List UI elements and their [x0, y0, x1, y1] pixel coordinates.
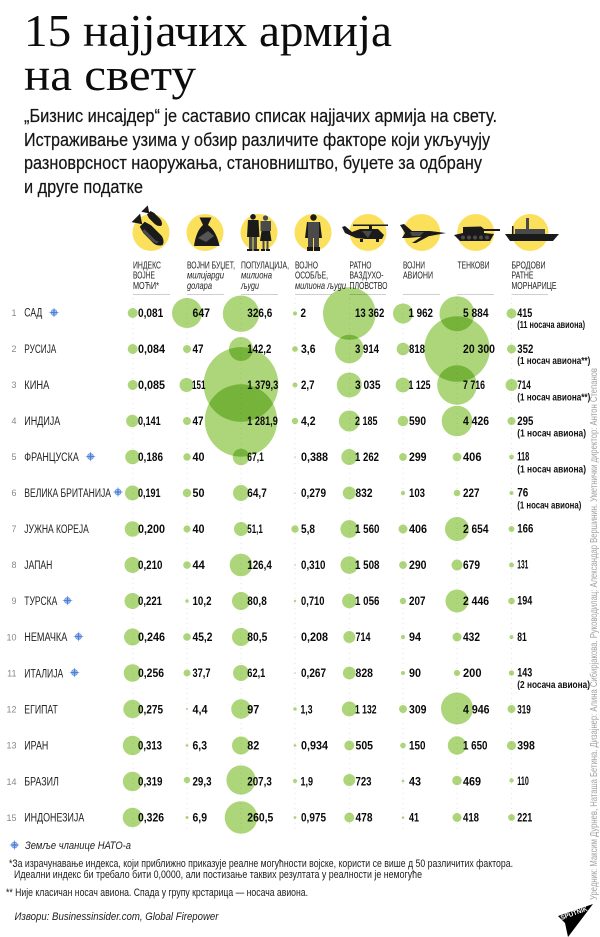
column: military power index: 0,256: [138, 668, 164, 680]
column: military budget: 45,2: [192, 632, 212, 644]
column headers: ВОЈНИ: [403, 260, 425, 272]
country ranking list: САД: [24, 308, 42, 320]
icon: tank: [454, 214, 500, 251]
column: tanks: 432: [463, 632, 480, 644]
column: tanks: 4 946: [463, 704, 490, 716]
column: navy ships: 118: [517, 452, 530, 464]
intro text: разноврсност наоружања, становништво, буџете за одбрану: [24, 153, 482, 173]
column: population: 97: [247, 704, 259, 716]
column: military aircraft: [393, 304, 433, 824]
icon: warship: [505, 214, 559, 251]
column: military aircraft: 1 125: [408, 380, 431, 392]
column: military personnel: 0,310: [301, 560, 326, 572]
column: air force: 1 560: [355, 524, 380, 536]
column headers: ВОЈНО: [295, 260, 318, 272]
country ranking list: [6, 308, 111, 824]
title: 15 најјачих армија: [24, 6, 392, 56]
column: military aircraft: 150: [409, 740, 426, 752]
column: military budget: 151: [192, 380, 206, 392]
column: tanks: [424, 296, 495, 824]
country ranking list: КИНА: [24, 380, 50, 392]
country ranking list: 3: [11, 380, 16, 390]
country ranking list: 7: [11, 524, 16, 534]
column: military power index: 0,210: [138, 560, 162, 572]
column: tanks: 2 446: [463, 596, 489, 608]
column: air force: 478: [356, 812, 373, 824]
column: navy ships: 319: [517, 704, 531, 716]
column headers: милијарди: [187, 270, 224, 282]
column headers: БРОДОВИ: [512, 260, 546, 272]
footnotes: [6, 858, 513, 899]
column: military aircraft: 41: [409, 812, 419, 824]
column: military budget: 40: [192, 524, 204, 536]
country ranking list: 4: [11, 416, 16, 426]
country ranking list: 14: [6, 777, 16, 787]
column: air force: 3 035: [355, 380, 381, 392]
column: military budget: 44: [192, 560, 205, 572]
country ranking list: 13: [6, 740, 16, 750]
country ranking list: ТУРСКА: [24, 596, 58, 608]
column: tanks: 469: [463, 776, 481, 788]
column: military aircraft: 406: [409, 524, 427, 536]
column: air force: 714: [356, 632, 371, 644]
column: population: 80,5: [247, 632, 268, 644]
column: navy ships: 131: [517, 560, 529, 572]
column: military personnel: [291, 308, 329, 824]
column: tanks: 418: [463, 812, 480, 824]
column: military personnel: 1,9: [300, 776, 313, 788]
column: population: 67,1: [247, 452, 264, 464]
column: military budget: 29,3: [192, 776, 212, 788]
sources: Извори: Businessinsider.com, Global Firepower: [14, 911, 220, 923]
column headers: ИНДЕКС: [133, 260, 161, 272]
column: air force: 1 262: [355, 452, 379, 464]
column: tanks: 2 654: [463, 524, 489, 536]
column: military budget: 6,3: [192, 740, 207, 752]
column: population: 260,5: [247, 812, 274, 824]
column: military power index: 0,081: [138, 308, 164, 320]
column: military power index: 0,326: [138, 812, 164, 824]
column: tanks: 227: [463, 488, 480, 500]
column: military power index: 0,246: [138, 632, 165, 644]
icon: people: [240, 214, 278, 251]
country ranking list: 5: [11, 452, 16, 462]
column: air force: 505: [356, 740, 374, 752]
column: tanks: 20 300: [463, 344, 495, 356]
column headers: ВОЈНИ БУЏЕТ,: [187, 260, 235, 272]
column: military aircraft: 103: [409, 488, 425, 500]
country ranking list: БРАЗИЛ: [24, 776, 59, 788]
country ranking list: ВЕЛИКА БРИТАНИЈА: [24, 488, 111, 500]
column: air force: 723: [356, 776, 372, 788]
column: military budget: 40: [192, 452, 204, 464]
column: population: 142,2: [247, 344, 271, 356]
intro text: и друге податке: [24, 177, 143, 197]
column: tanks: 200: [463, 668, 482, 680]
title: на свету: [24, 50, 197, 100]
column: military personnel: 0,267: [301, 668, 326, 680]
column: air force: 1 056: [355, 596, 380, 608]
column: military budget: 37,7: [192, 668, 210, 680]
column headers: милиона: [241, 270, 272, 282]
column: military budget: 6,9: [192, 812, 207, 824]
intro text: [24, 106, 497, 197]
country ranking list: 12: [6, 704, 16, 714]
logo: Sputnik: [558, 904, 593, 937]
column: military aircraft: 590: [409, 416, 426, 428]
NATO markers: [48, 307, 124, 678]
column: military budget: [172, 298, 212, 824]
credits: Уредник: Максим Дурнев, Наташа Бетина. Дизајнер: Алина Сибирјакова. Руководилац: Александар Вершинин. Уметнички директор: Антон Степанов: [588, 368, 600, 900]
logo: Sputnik: SPUTNIK: [560, 906, 589, 922]
column headers: ПОПУЛАЦИЈА,: [241, 260, 289, 272]
icon: helicopter: [342, 214, 388, 251]
column: population: 80,8: [247, 596, 267, 608]
column: population: 1 281,9: [247, 416, 278, 428]
column: military power index: 0,200: [138, 524, 165, 536]
column: military aircraft: 94: [409, 632, 422, 644]
column headers: АВИОНИ: [403, 270, 433, 282]
country ranking list: ФРАНЦУСКА: [24, 452, 79, 464]
column: military power index: 0,319: [138, 776, 162, 788]
column: military aircraft: 309: [409, 704, 426, 716]
column headers: РАТНО: [350, 260, 372, 272]
country ranking list: 2: [11, 344, 16, 354]
column: military personnel: 0,279: [301, 488, 326, 500]
column headers: МОРНАРИЦЕ: [512, 280, 556, 292]
column: military aircraft: 90: [409, 668, 421, 680]
icon: soldier: [294, 214, 332, 251]
column: tanks: 7 716: [463, 380, 485, 392]
column: military power index: 0,275: [138, 704, 164, 716]
column: navy ships: 143: [517, 668, 532, 680]
title: [24, 6, 392, 100]
column: military aircraft: 290: [409, 560, 426, 572]
column: navy ships: 166: [517, 524, 533, 536]
column: navy ships: 398: [517, 740, 535, 752]
column: military personnel: 3,6: [301, 344, 316, 356]
column: tanks: 5 884: [463, 308, 489, 320]
column: air force: 2 185: [355, 416, 378, 428]
column: population: 51,1: [247, 524, 263, 536]
column: military personnel: 1,3: [300, 704, 312, 716]
column: military personnel: 0,934: [301, 740, 329, 752]
country ranking list: НЕМАЧКА: [24, 632, 68, 644]
country ranking list: ЈАПАН: [24, 560, 52, 572]
column: air force: 832: [356, 488, 372, 500]
column: military personnel: 0,208: [301, 632, 329, 644]
column: military personnel: 0,975: [301, 812, 327, 824]
column: air force: 1 132: [355, 704, 376, 716]
column: navy ships: 352: [517, 344, 533, 356]
column: military personnel: 0,388: [301, 452, 329, 464]
column: military power index: 0,191: [138, 488, 161, 500]
column: tanks: 406: [463, 452, 482, 464]
column: military personnel: 4,2: [301, 416, 316, 428]
column: navy ships: 76: [517, 488, 528, 500]
column headers: МОЋИ*: [133, 280, 159, 292]
column: military budget: 47: [192, 416, 204, 428]
column: navy ships: [506, 308, 590, 824]
column: military budget: 50: [192, 488, 204, 500]
column headers: ТЕНКОВИ: [458, 260, 490, 272]
column: military aircraft: 207: [409, 596, 426, 608]
column: air force: 3 914: [355, 344, 380, 356]
footnotes: ** Није класичан носач авиона. Спада у групу крстарица — носача авиона.: [6, 887, 308, 899]
column: population: [204, 296, 278, 834]
country ranking list: ИТАЛИЈА: [24, 668, 64, 680]
column: population: 82: [247, 740, 259, 752]
column headers: [133, 260, 556, 292]
column: military power index: 0,221: [138, 596, 163, 608]
legend: NATO members: Земље чланице НАТО-а: [25, 840, 131, 852]
column: military power index: 0,084: [138, 344, 166, 356]
column: air force: 828: [356, 668, 374, 680]
column: military aircraft: 299: [409, 452, 426, 464]
column: military budget: 647: [192, 308, 210, 320]
column: navy ships: 714: [517, 380, 531, 392]
column headers: ПЛОВСТВО: [350, 280, 388, 292]
country ranking list: 8: [11, 560, 16, 570]
column headers: ВАЗДУХО-: [350, 270, 384, 282]
column: military budget: 10,2: [192, 596, 212, 608]
column: tanks: 4 426: [463, 416, 489, 428]
column: navy ships: 221: [517, 812, 533, 824]
country ranking list: ИНДИЈА: [24, 416, 61, 428]
column: air force: [323, 287, 384, 824]
column: air force: 1 508: [355, 560, 380, 572]
column: military aircraft: 1 962: [408, 308, 433, 320]
column: military personnel: 0,710: [301, 596, 324, 608]
column: military power index: [123, 308, 166, 827]
icon: fighter jet: [400, 214, 446, 251]
column: navy ships: 415: [517, 308, 533, 320]
country ranking list: ЕГИПАТ: [24, 704, 58, 716]
column: military aircraft: 43: [409, 776, 421, 788]
column: air force: 13 362: [355, 308, 384, 320]
intro text: „Бизнис инсајдер“ је саставио списак најјачих армија на свету.: [24, 106, 497, 126]
column: navy ships: 81: [517, 632, 527, 644]
footnotes: Идеални индекс би требало бити 0,0000, али постизање таквих резултата у реалности је немогуће: [14, 869, 422, 881]
country ranking list: РУСИЈА: [24, 344, 57, 356]
column: navy ships: 110: [517, 776, 529, 788]
column: tanks: 679: [463, 560, 480, 572]
column: population: 64,7: [247, 488, 267, 500]
column: military power index: 0,186: [138, 452, 163, 464]
icon: bombs: [132, 205, 170, 251]
country ranking list: 9: [11, 596, 16, 606]
column: navy ships: 194: [517, 596, 533, 608]
country ranking list: 6: [11, 488, 16, 498]
column: military power index: 0,141: [138, 416, 161, 428]
column headers: ОСОБЉЕ,: [295, 270, 328, 282]
column: military budget: 4,4: [192, 704, 208, 716]
intro text: Истраживање узима у обзир различите факторе који укључују: [24, 130, 490, 150]
column: population: 126,4: [247, 560, 272, 572]
country ranking list: 15: [6, 813, 16, 823]
column: navy ships: 295: [517, 416, 534, 428]
column: military power index: 0,313: [138, 740, 162, 752]
column: military personnel: 2: [300, 308, 306, 320]
country ranking list: ИНДОНЕЗИЈА: [24, 812, 85, 824]
column headers: долара: [187, 280, 212, 292]
country ranking list: ИРАН: [24, 740, 48, 752]
country ranking list: ЈУЖНА КОРЕЈА: [24, 524, 89, 536]
column: population: 326,6: [247, 308, 272, 320]
column: military aircraft: 818: [409, 344, 426, 356]
column: population: 62,1: [247, 668, 266, 680]
column headers: милиона људи: [295, 280, 346, 292]
column headers: ВОЈНЕ: [133, 270, 155, 282]
column: military personnel: 5,8: [301, 524, 316, 536]
country ranking list: 10: [6, 632, 16, 642]
country ranking list: 1: [11, 308, 16, 318]
column headers: људи: [240, 280, 259, 292]
column headers: РАТНЕ: [512, 270, 534, 282]
column: military power index: 0,085: [138, 380, 166, 392]
column: military budget: 47: [192, 344, 204, 356]
column: population: 1 379,3: [247, 380, 278, 392]
column: population: 207,3: [247, 776, 272, 788]
column: military personnel: 2,7: [301, 380, 314, 392]
column: tanks: 1 650: [463, 740, 488, 752]
icon: money bag: [186, 214, 224, 251]
country ranking list: 11: [7, 668, 16, 678]
